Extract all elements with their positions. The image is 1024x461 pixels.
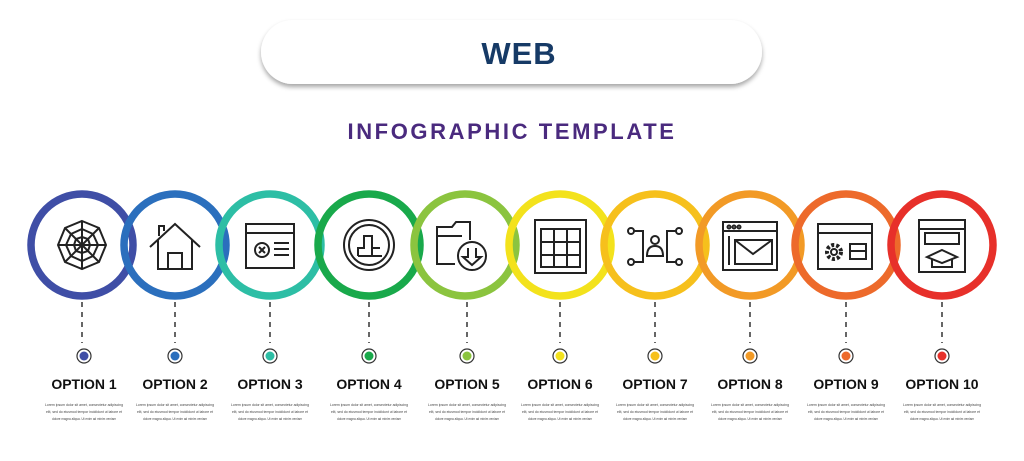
icon: browser x [246, 224, 294, 268]
description texts: elit, sed do eiusmod tempor incididunt ut labore et [232, 410, 308, 414]
description texts: elit, sed do eiusmod tempor incididunt ut labore et [46, 410, 122, 414]
icon: coin [344, 220, 394, 270]
description texts: elit, sed do eiusmod tempor incididunt ut labore et [429, 410, 505, 414]
icons [58, 220, 965, 273]
icon: education browser [919, 220, 965, 272]
icon: settings browser [818, 224, 872, 269]
description texts: dolore magna aliqua. Ut enim ad minim veniam [238, 417, 302, 421]
description texts: Lorem ipsum dolor sit amet, consectetur adipiscing [231, 403, 309, 407]
description texts [45, 403, 981, 421]
option labels: OPTION 7 [622, 376, 688, 392]
rings [31, 194, 993, 296]
description texts: dolore magna aliqua. Ut enim ad minim veniam [718, 417, 782, 421]
option labels: OPTION 3 [237, 376, 303, 392]
description texts: Lorem ipsum dolor sit amet, consectetur adipiscing [807, 403, 885, 407]
description texts: elit, sed do eiusmod tempor incididunt ut labore et [522, 410, 598, 414]
description texts: dolore magna aliqua. Ut enim ad minim veniam [528, 417, 592, 421]
description texts: elit, sed do eiusmod tempor incididunt ut labore et [904, 410, 980, 414]
option labels: OPTION 6 [527, 376, 593, 392]
icon: house [150, 224, 200, 269]
description texts: dolore magna aliqua. Ut enim ad minim veniam [143, 417, 207, 421]
description texts: elit, sed do eiusmod tempor incididunt ut labore et [712, 410, 788, 414]
description texts: dolore magna aliqua. Ut enim ad minim veniam [814, 417, 878, 421]
option labels: OPTION 2 [142, 376, 208, 392]
option labels: OPTION 10 [905, 376, 979, 392]
description texts: Lorem ipsum dolor sit amet, consectetur adipiscing [45, 403, 123, 407]
description texts: dolore magna aliqua. Ut enim ad minim veniam [337, 417, 401, 421]
icon: folder download [437, 222, 486, 270]
description texts: elit, sed do eiusmod tempor incididunt ut labore et [617, 410, 693, 414]
description texts: dolore magna aliqua. Ut enim ad minim veniam [435, 417, 499, 421]
description texts: dolore magna aliqua. Ut enim ad minim veniam [623, 417, 687, 421]
option labels: OPTION 4 [336, 376, 402, 392]
option labels: OPTION 8 [717, 376, 783, 392]
option labels [51, 376, 979, 392]
description texts: elit, sed do eiusmod tempor incididunt ut labore et [808, 410, 884, 414]
description texts: dolore magna aliqua. Ut enim ad minim veniam [52, 417, 116, 421]
icon: grid [535, 220, 586, 273]
description texts: Lorem ipsum dolor sit amet, consectetur adipiscing [136, 403, 214, 407]
option labels: OPTION 1 [51, 376, 117, 392]
option labels: OPTION 9 [813, 376, 879, 392]
description texts: dolore magna aliqua. Ut enim ad minim veniam [910, 417, 974, 421]
description texts: Lorem ipsum dolor sit amet, consectetur adipiscing [711, 403, 789, 407]
description texts: Lorem ipsum dolor sit amet, consectetur adipiscing [428, 403, 506, 407]
description texts: Lorem ipsum dolor sit amet, consectetur adipiscing [616, 403, 694, 407]
title pill [261, 20, 762, 84]
subtitle: INFOGRAPHIC TEMPLATE [347, 119, 677, 144]
icon: email browser [723, 222, 777, 270]
description texts: Lorem ipsum dolor sit amet, consectetur adipiscing [330, 403, 408, 407]
description texts: Lorem ipsum dolor sit amet, consectetur adipiscing [521, 403, 599, 407]
option labels: OPTION 5 [434, 376, 500, 392]
description texts: elit, sed do eiusmod tempor incididunt ut labore et [331, 410, 407, 414]
connectors [82, 302, 942, 343]
icon: spider web [58, 221, 106, 269]
icon: user network [628, 228, 682, 265]
description texts: Lorem ipsum dolor sit amet, consectetur adipiscing [903, 403, 981, 407]
marker dots [77, 349, 949, 363]
title: WEB [481, 36, 557, 71]
description texts: elit, sed do eiusmod tempor incididunt ut labore et [137, 410, 213, 414]
